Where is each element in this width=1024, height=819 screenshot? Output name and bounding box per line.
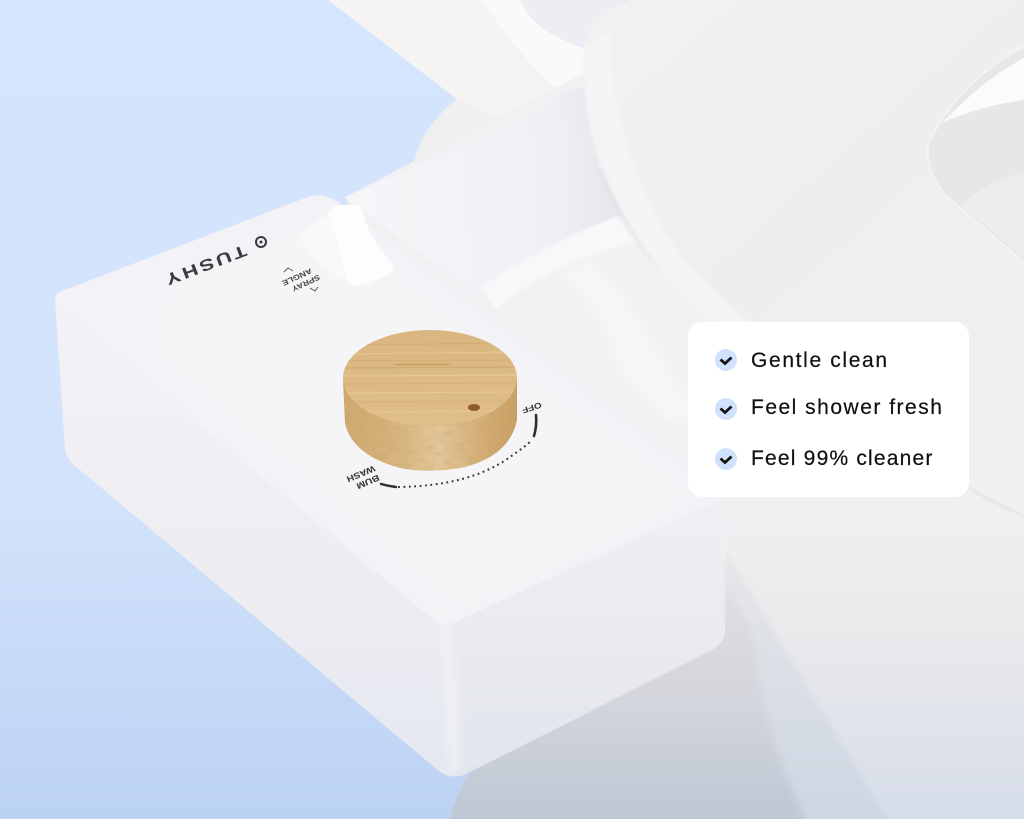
spray angle switch xyxy=(298,205,393,285)
callout card: benefits list xyxy=(688,322,969,497)
box right face xyxy=(444,497,725,776)
spray angle label: ANGLE xyxy=(281,266,313,288)
logo: TUSHY: TUSHY xyxy=(160,241,249,288)
logo: TUSHY xyxy=(160,237,266,288)
wood grain xyxy=(340,343,520,412)
box corner highlight xyxy=(440,620,462,770)
wash dial scale: WASH xyxy=(345,464,377,484)
benefit: feel shower fresh: Feel shower fresh xyxy=(751,396,943,419)
box left face xyxy=(55,300,458,776)
bidet control box xyxy=(55,195,725,776)
front edge highlight xyxy=(432,505,665,615)
box top face xyxy=(55,195,721,625)
toilet lower bowl xyxy=(450,488,1024,819)
spray angle label xyxy=(281,266,321,293)
wash dial scale: OFF xyxy=(521,400,543,415)
benefit: gentle clean: Gentle clean xyxy=(751,349,889,372)
benefit: feel 99% cleaner: Feel 99% cleaner xyxy=(751,447,934,470)
bidet mounting arm xyxy=(345,70,745,560)
toilet seat lid xyxy=(583,0,1024,517)
spray angle label: SPRAY xyxy=(291,273,321,293)
wash dial scale: BUM xyxy=(355,473,381,491)
bamboo dial knob xyxy=(340,330,520,474)
toilet tank and hinge xyxy=(328,0,625,140)
top panel shading xyxy=(150,225,690,600)
toilet bowl rim xyxy=(413,98,520,170)
wash dial scale xyxy=(345,400,543,491)
